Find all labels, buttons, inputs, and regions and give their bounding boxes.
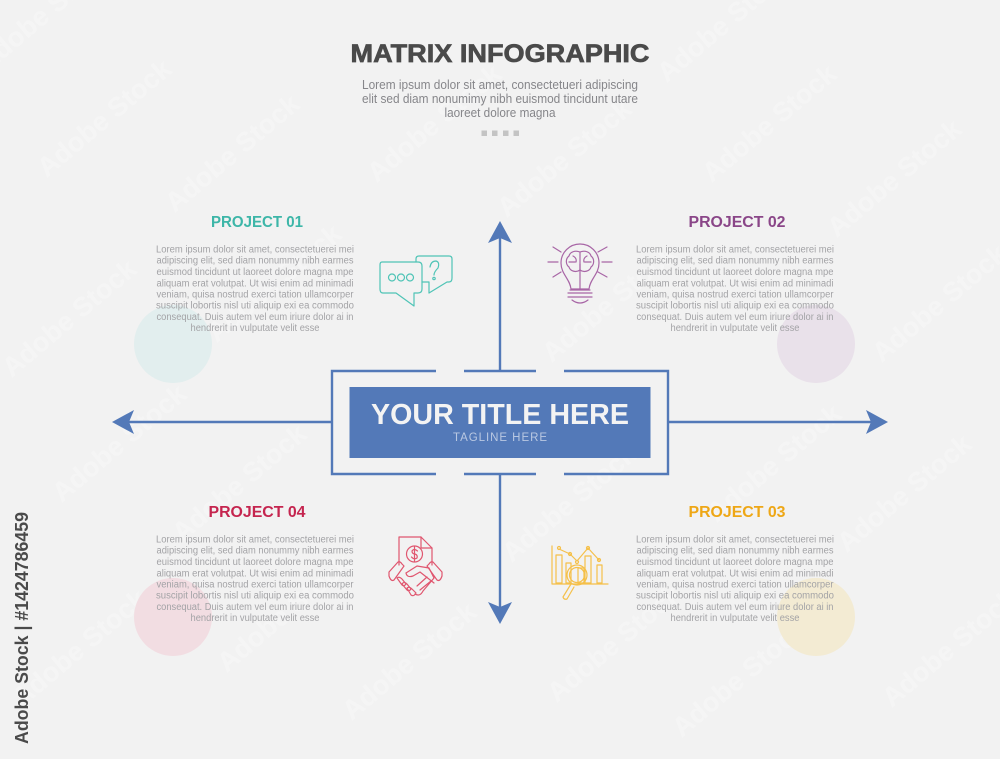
body text: suscipit lobortis nisl uti aliquip exi ea commodo bbox=[636, 300, 834, 312]
body text: Lorem ipsum dolor sit amet, consectetuerei mei bbox=[636, 244, 834, 256]
body text: adipiscing elit, sed diam nonummy nibh earmes bbox=[156, 546, 354, 556]
text: Adobe Stock bbox=[159, 88, 306, 218]
panel: project 02 bbox=[548, 214, 834, 334]
heading: PROJECT 04 bbox=[208, 504, 306, 521]
text: Adobe Stock bbox=[31, 53, 178, 183]
heading: PROJECT 01 bbox=[211, 214, 303, 231]
body text: euismod tincidunt ut laoreet dolore magna mpe bbox=[156, 557, 354, 568]
title: MATRIX INFOGRAPHIC bbox=[350, 40, 650, 68]
text: Adobe Stock bbox=[701, 398, 848, 528]
heading: PROJECT 03 bbox=[688, 504, 786, 521]
matrix axes and arrows bbox=[112, 221, 888, 624]
tagline: TAGLINE HERE bbox=[453, 432, 547, 444]
body text: hendrerit in vulputate velit esse bbox=[190, 323, 320, 334]
body text: Lorem ipsum dolor sit amet, consectetuerei mei bbox=[156, 534, 354, 546]
text: Adobe Stock bbox=[536, 238, 683, 368]
body text bbox=[156, 244, 354, 334]
body text: aliquam erat volutpat. Ut wisi enim ad minimadi bbox=[636, 278, 834, 290]
body text bbox=[156, 534, 354, 624]
subtitle bbox=[362, 78, 638, 120]
text: Adobe Stock bbox=[496, 438, 643, 568]
body text: consequat. Duis autem vel eum iriure dolor ai in bbox=[636, 602, 834, 613]
decorative circle: project 02 bbox=[777, 305, 855, 383]
body text: adipiscing elit, sed diam nonummy nibh earmes bbox=[636, 546, 834, 556]
body text: veniam, quisa nostrud exerci tation ullamcorper bbox=[636, 580, 834, 590]
body text: suscipit lobortis nisl uti aliquip exi ea commodo bbox=[636, 590, 834, 602]
text: Adobe Stock bbox=[821, 113, 968, 243]
body text: consequat. Duis autem vel eum iriure dolor ai in bbox=[636, 312, 834, 323]
arrow: up bbox=[488, 221, 512, 370]
center title box bbox=[350, 387, 650, 458]
subtitle: laoreet dolore magna bbox=[444, 106, 556, 120]
text: Adobe Stock bbox=[166, 418, 313, 548]
icon: bar chart with magnifier bbox=[552, 546, 608, 599]
icon: light bulb with brain bbox=[548, 244, 612, 303]
text: Adobe Stock bbox=[666, 613, 813, 743]
panel: project 04 bbox=[156, 504, 442, 624]
decorative circle: project 04 bbox=[134, 578, 212, 656]
text: Adobe Stock bbox=[201, 218, 348, 348]
body text: euismod tincidunt ut laoreet dolore magna mpe bbox=[636, 557, 834, 568]
text: Adobe Stock bbox=[211, 548, 358, 678]
title dots bbox=[482, 130, 519, 136]
body text: veniam, quisa nostrud exerci tation ullamcorper bbox=[156, 580, 354, 590]
text: Adobe Stock bbox=[831, 428, 978, 558]
panel: project 01 bbox=[156, 214, 452, 334]
body text: adipiscing elit, sed diam nonummy nibh earmes bbox=[156, 256, 354, 266]
body text bbox=[636, 244, 834, 334]
body text: veniam, quisa nostrud exerci tation ullamcorper bbox=[156, 290, 354, 300]
body text: aliquam erat volutpat. Ut wisi enim ad minimadi bbox=[156, 278, 354, 290]
body text: suscipit lobortis nisl uti aliquip exi ea commodo bbox=[156, 590, 354, 602]
text: Adobe Stock bbox=[46, 378, 193, 508]
arrow: down bbox=[488, 474, 512, 624]
arrow: right bbox=[669, 410, 888, 434]
body text: consequat. Duis autem vel eum iriure dolor ai in bbox=[156, 602, 354, 613]
text: Adobe Stock bbox=[6, 583, 153, 713]
body text bbox=[636, 534, 834, 624]
body text: aliquam erat volutpat. Ut wisi enim ad minimadi bbox=[156, 568, 354, 580]
text: Adobe Stock bbox=[0, 253, 143, 383]
heading: PROJECT 02 bbox=[688, 214, 786, 231]
stock id label: Adobe Stock | #1424786459 bbox=[12, 512, 32, 744]
body text: aliquam erat volutpat. Ut wisi enim ad minimadi bbox=[636, 568, 834, 580]
decorative circle: project 01 bbox=[134, 305, 212, 383]
center title: YOUR TITLE HERE bbox=[371, 399, 629, 431]
text: Adobe Stock bbox=[696, 58, 843, 188]
text: Adobe Stock bbox=[491, 93, 638, 223]
text: Adobe Stock bbox=[541, 578, 688, 708]
body text: Lorem ipsum dolor sit amet, consectetuerei mei bbox=[636, 534, 834, 546]
body text: hendrerit in vulputate velit esse bbox=[190, 613, 320, 624]
body text: Lorem ipsum dolor sit amet, consectetuerei mei bbox=[156, 244, 354, 256]
body text: euismod tincidunt ut laoreet dolore magna mpe bbox=[636, 267, 834, 278]
icon: speech bubbles bbox=[380, 256, 452, 306]
body text: hendrerit in vulputate velit esse bbox=[670, 323, 800, 334]
subtitle: Lorem ipsum dolor sit amet, consectetueri adipiscing bbox=[362, 78, 638, 92]
body text: euismod tincidunt ut laoreet dolore magna mpe bbox=[156, 267, 354, 278]
body text: hendrerit in vulputate velit esse bbox=[670, 613, 800, 624]
subtitle: elit sed diam nonumimy nibh euismod tincidunt utare bbox=[362, 92, 638, 106]
center frame bbox=[332, 371, 668, 474]
arrow: left bbox=[112, 410, 331, 434]
panel: project 03 bbox=[552, 504, 834, 624]
decorative circle: project 03 bbox=[777, 578, 855, 656]
body text: adipiscing elit, sed diam nonummy nibh earmes bbox=[636, 256, 834, 266]
text: Adobe Stock bbox=[361, 58, 508, 188]
text: Adobe Stock bbox=[336, 596, 483, 726]
icon: handshake and invoice bbox=[389, 537, 442, 596]
body text: consequat. Duis autem vel eum iriure dolor ai in bbox=[156, 312, 354, 323]
body text: veniam, quisa nostrud exerci tation ullamcorper bbox=[636, 290, 834, 300]
body text: suscipit lobortis nisl uti aliquip exi ea commodo bbox=[156, 300, 354, 312]
